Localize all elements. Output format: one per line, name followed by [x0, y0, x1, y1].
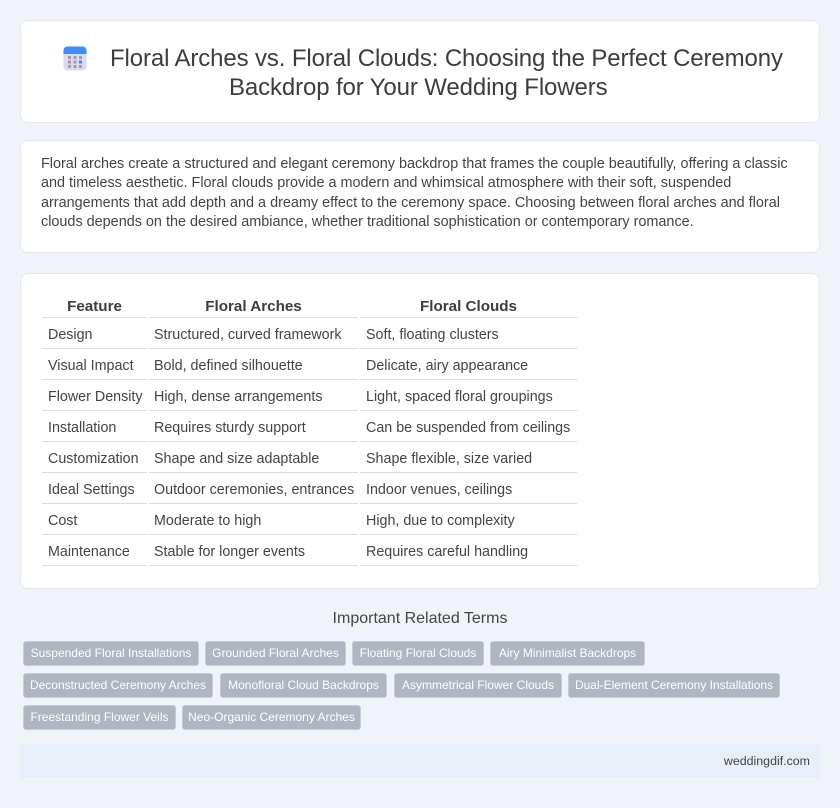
comparison table: Moderate to high [154, 513, 261, 529]
icon: calendar [64, 46, 86, 70]
header panel [20, 20, 820, 123]
comparison table: Bold, defined silhouette [154, 358, 303, 374]
comparison table: Shape flexible, size varied [366, 451, 532, 467]
comparison table: Requires careful handling [366, 544, 528, 560]
table panel [20, 273, 820, 589]
related term tags: Asymmetrical Flower Clouds [402, 678, 554, 692]
comparison table: Flower Density [48, 389, 143, 405]
intro text: clouds depends on the desired ambiance, whether traditional sophistication or contemporary romance. [41, 214, 694, 230]
comparison table: Customization [48, 451, 139, 467]
comparison table: Stable for longer events [154, 544, 305, 560]
comparison table: Light, spaced floral groupings [366, 389, 553, 405]
comparison table: Design [48, 327, 93, 343]
title: Backdrop for Your Wedding Flowers [229, 74, 607, 101]
comparison table: Structured, curved framework [154, 327, 342, 343]
comparison table: Delicate, airy appearance [366, 358, 528, 374]
related term tags: Monofloral Cloud Backdrops [228, 678, 379, 692]
comparison table: Requires sturdy support [154, 420, 306, 436]
title [110, 45, 783, 101]
related term tags: Grounded Floral Arches [212, 646, 339, 660]
related term tags: Freestanding Flower Veils [30, 710, 169, 724]
comparison table: Maintenance [48, 544, 130, 560]
comparison table: High, dense arrangements [154, 389, 322, 405]
related term tags: Neo-Organic Ceremony Arches [188, 710, 355, 724]
footer source: weddingdif.com [724, 754, 810, 768]
intro text: and timeless aesthetic. Floral clouds provide a modern and whimsical atmosphere with their soft, suspended [41, 175, 731, 191]
related term tags: Airy Minimalist Backdrops [499, 646, 636, 660]
comparison table: Can be suspended from ceilings [366, 420, 570, 436]
comparison table: Outdoor ceremonies, entrances [154, 482, 354, 498]
related term tags: Suspended Floral Installations [31, 646, 191, 660]
comparison table: Indoor venues, ceilings [366, 482, 512, 498]
related term tags: Floating Floral Clouds [360, 646, 476, 660]
intro text: arrangements that add depth and a dreamy effect to the ceremony space. Choosing between floral arches and floral [41, 195, 780, 211]
comparison table: Installation [48, 420, 116, 436]
comparison table: Floral Arches [205, 298, 302, 315]
intro panel [20, 140, 820, 253]
comparison table [42, 298, 577, 566]
comparison table: High, due to complexity [366, 513, 515, 529]
comparison table: Shape and size adaptable [154, 451, 319, 467]
related term tags [23, 641, 780, 730]
comparison table: Soft, floating clusters [366, 327, 499, 343]
footer bar [20, 744, 820, 778]
comparison table: Floral Clouds [420, 298, 517, 315]
comparison table: Ideal Settings [48, 482, 135, 498]
intro text [41, 156, 788, 230]
comparison table: Feature [67, 298, 122, 315]
related term tags: Deconstructed Ceremony Arches [30, 678, 206, 692]
title: Floral Arches vs. Floral Clouds: Choosing the Perfect Ceremony [110, 45, 783, 72]
comparison table: Visual Impact [48, 358, 134, 374]
related term tags: Dual-Element Ceremony Installations [575, 678, 773, 692]
comparison table: Cost [48, 513, 77, 529]
intro text: Floral arches create a structured and elegant ceremony backdrop that frames the couple beautifully, offering a classic [41, 156, 788, 172]
related terms heading: Important Related Terms [333, 610, 507, 627]
